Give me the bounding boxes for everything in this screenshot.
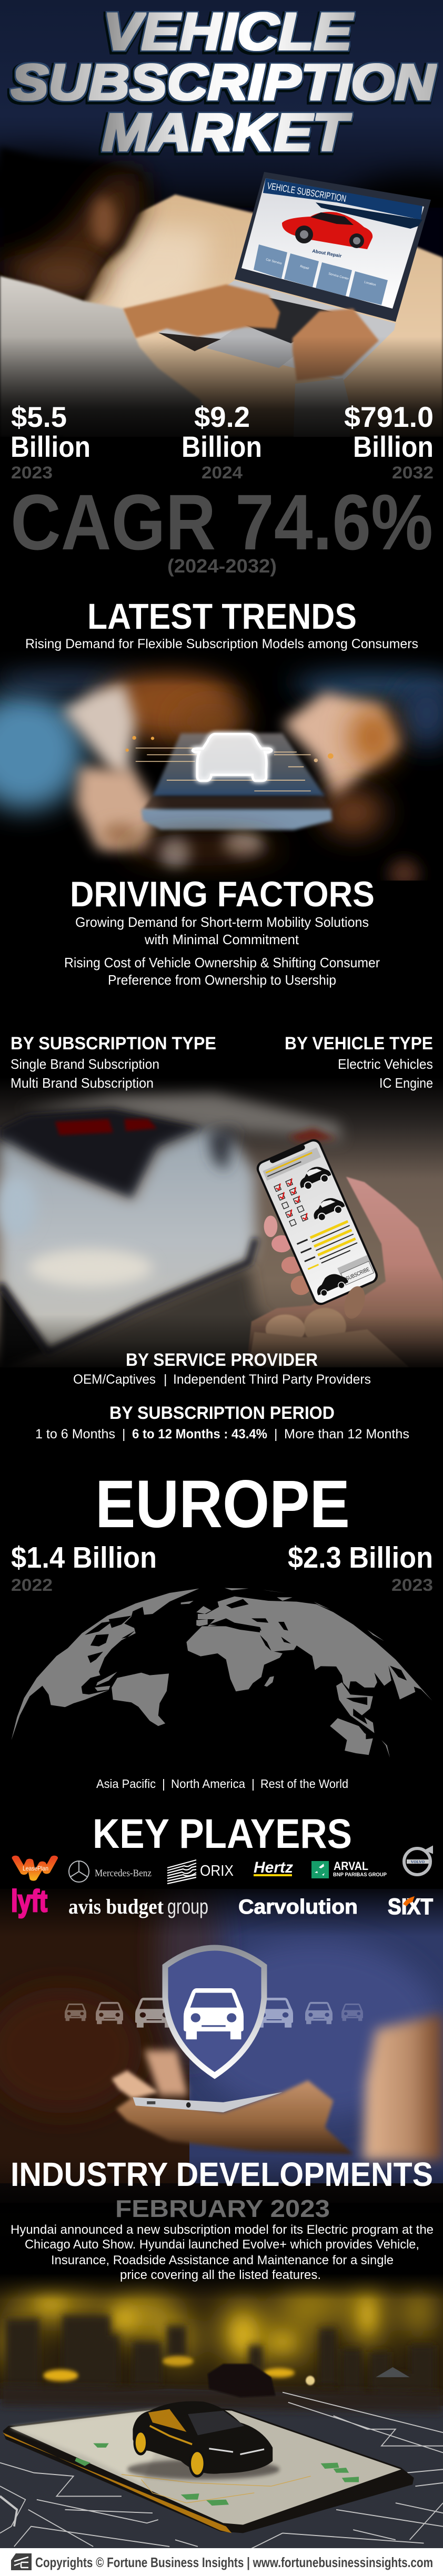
icon: glowing car [193,734,271,781]
driving factor two: Preference from Ownership to Usership [108,972,336,988]
market stat: 2023 [11,401,90,482]
subscription period items: 1 to 6 Months [35,1427,115,1442]
service provider items: OEM/Captives [73,1372,156,1387]
service provider items [73,1372,371,1387]
Europe stat 2022: $1.4 Billion [11,1541,157,1575]
laptop: About Repair [312,248,343,259]
logo: Mercedes-Benz [69,1861,152,1882]
market stat: 2032: Billion [353,430,434,463]
logo: ORIX [167,1860,234,1884]
heading: Europe: EUROPE [95,1467,350,1542]
small background cars [65,1998,363,2028]
logo: Arval [311,1859,387,1878]
black car on tablet [127,2401,280,2479]
fingers in front of phone [249,1284,410,1368]
market stat: 2024: $9.2 [194,401,250,433]
other regions: Asia Pacific [96,1777,156,1791]
development text: Chicago Auto Show. Hyundai launched Evolve+ which provides Vehicle, [25,2237,419,2252]
driving factor one: Growing Demand for Short-term Mobility Solutions [75,914,369,930]
market stat: 2023: $5.5 [11,401,67,433]
market stat: 2032: $791.0 [344,401,434,433]
vehicle type items: Electric Vehicles [338,1056,433,1072]
development text: price covering all the listed features. [120,2268,321,2282]
development text: Insurance, Roadside Assistance and Maintenance for a single [51,2253,394,2267]
red car on screen [282,212,372,249]
market stat: 2023: 2023 [11,463,53,482]
heading: subscription period: BY SUBSCRIPTION PERIOD [109,1403,335,1423]
photo: city, tablet map and black car [0,2272,443,2553]
vehicle type items [338,1056,433,1091]
hero photo: person using laptop [0,0,443,437]
driving factor one: with Minimal Commitment [144,932,299,947]
Europe stat 2023 [288,1541,433,1594]
market stat: 2032 [344,401,434,482]
logo: Arval: ARVAL [334,1859,368,1873]
other regions: | [162,1777,165,1791]
laptop: Service Center [328,272,349,281]
latest trends text: Rising Demand for Flexible Subscription Models among Consumers [25,637,418,651]
logo: Sixt: SIXT [388,1894,433,1919]
hands on keyboard [123,284,379,437]
market stat: 2024 [182,401,262,482]
logo: Fortune Business Insights [11,2553,32,2570]
Europe stat 2023: $2.3 Billion [288,1541,433,1575]
service tiles [254,244,287,279]
laptop: Car Service [265,258,283,265]
photo: hands holding smartphone with glowing car [0,649,443,888]
logo: Mercedes-Benz: Mercedes-Benz [95,1868,152,1879]
subscription period items: More than 12 Months [284,1427,409,1442]
heading: subscription type: BY SUBSCRIPTION TYPE [11,1034,216,1054]
vehicle type items: IC Engine [379,1075,433,1091]
logo: Avis Budget Group: group [167,1895,208,1918]
driving factor two [64,955,380,988]
laptop: VEHICLE SUBSCRIPTION [266,180,347,204]
tablet [3,2406,414,2533]
subscription period items: | [274,1427,278,1442]
title: VEHICLE [103,2,354,60]
Europe stat 2022: 2022 [11,1576,53,1594]
logo: LeasePlan: LeasePlan [23,1865,48,1872]
market stat: 2032: 2032 [392,463,434,482]
development text: Hyundai announced a new subscription model for its Electric program at the [11,2223,434,2237]
smartphone [125,733,334,830]
subscription type items [11,1056,159,1091]
subscription period items [35,1427,409,1442]
development date: FEBRUARY 2023 [115,2195,330,2222]
title: SUBSCRIPTION [11,54,436,110]
icons: cars and checkboxes on screen [274,1162,347,1233]
footer bar [0,2548,443,2576]
other regions: Rest of the World [260,1777,348,1791]
smartphone with subscribe screen [254,1137,380,1307]
city ground with map roads [0,2389,443,2553]
wooden table [63,195,443,437]
hand holding phone [246,1177,443,1373]
subscribe button [337,1255,375,1285]
CAGR: (2024-2032) [167,555,277,577]
other regions: North America [171,1777,245,1791]
subscription type items: Single Brand Subscription [11,1056,159,1072]
logo: Lyft: lyft [11,1884,47,1918]
logo: ORIX: ORIX [200,1863,234,1879]
laptop: Repair [299,265,309,271]
logo: Volvo [404,1846,432,1875]
world map globe [11,1588,432,1757]
logo: Hertz: Hertz [254,1859,293,1876]
logo: Arval: BNP PARIBAS GROUP [333,1872,387,1878]
heading: key players: KEY PLAYERS [93,1810,352,1857]
market stat: 2023: Billion [11,430,90,463]
market stat: 2024: 2024 [202,463,243,482]
laptop: Location [364,281,376,287]
heading: driving factors: DRIVING FACTORS [70,874,375,914]
laptop [158,172,431,381]
development text [11,2223,434,2282]
subscription type items: Multi Brand Subscription [11,1075,154,1091]
title: MARKET [102,103,352,162]
logo: Volvo: VOLVO [411,1859,425,1864]
service provider items: Independent Third Party Providers [173,1372,371,1387]
heading: latest trends: LATEST TRENDS [87,596,357,637]
Europe stat 2023: 2023 [391,1576,433,1594]
title [11,2,436,162]
hand holding phone [112,2050,353,2154]
logo: Carvolution: Carvolution [238,1896,358,1918]
subscription period items: | [122,1427,125,1442]
text lines on screen [296,1220,359,1270]
white shirt [0,276,221,437]
logo: Avis Budget Group: avis budget [68,1895,164,1918]
other regions: | [251,1777,255,1791]
heading: service provider: BY SERVICE PROVIDER [126,1350,318,1370]
subscribe button: SUBSCRIBE [345,1266,370,1282]
subscription period items: 6 to 12 Months : 43.4% [132,1427,267,1442]
blurred car in background [208,2364,276,2397]
service provider items: | [164,1372,167,1387]
icon: shield car [184,1988,244,2039]
forearm right [363,2013,443,2161]
heading: vehicle type: BY VEHICLE TYPE [285,1034,433,1054]
other regions [96,1777,348,1791]
market stat: 2024: Billion [182,430,262,463]
photo: hand with phone and car shield [0,1851,443,2240]
driving factor two: Rising Cost of Vehicle Ownership & Shifting Consumer [64,955,380,970]
person hair and neck [0,147,142,302]
logo: LeasePlan [16,1858,54,1878]
driving factor one [75,914,369,947]
shield [165,1948,264,2076]
icon: small car [313,1269,350,1299]
Europe stat 2022 [11,1541,157,1594]
photo: white car and phone in hand [0,1078,443,1373]
